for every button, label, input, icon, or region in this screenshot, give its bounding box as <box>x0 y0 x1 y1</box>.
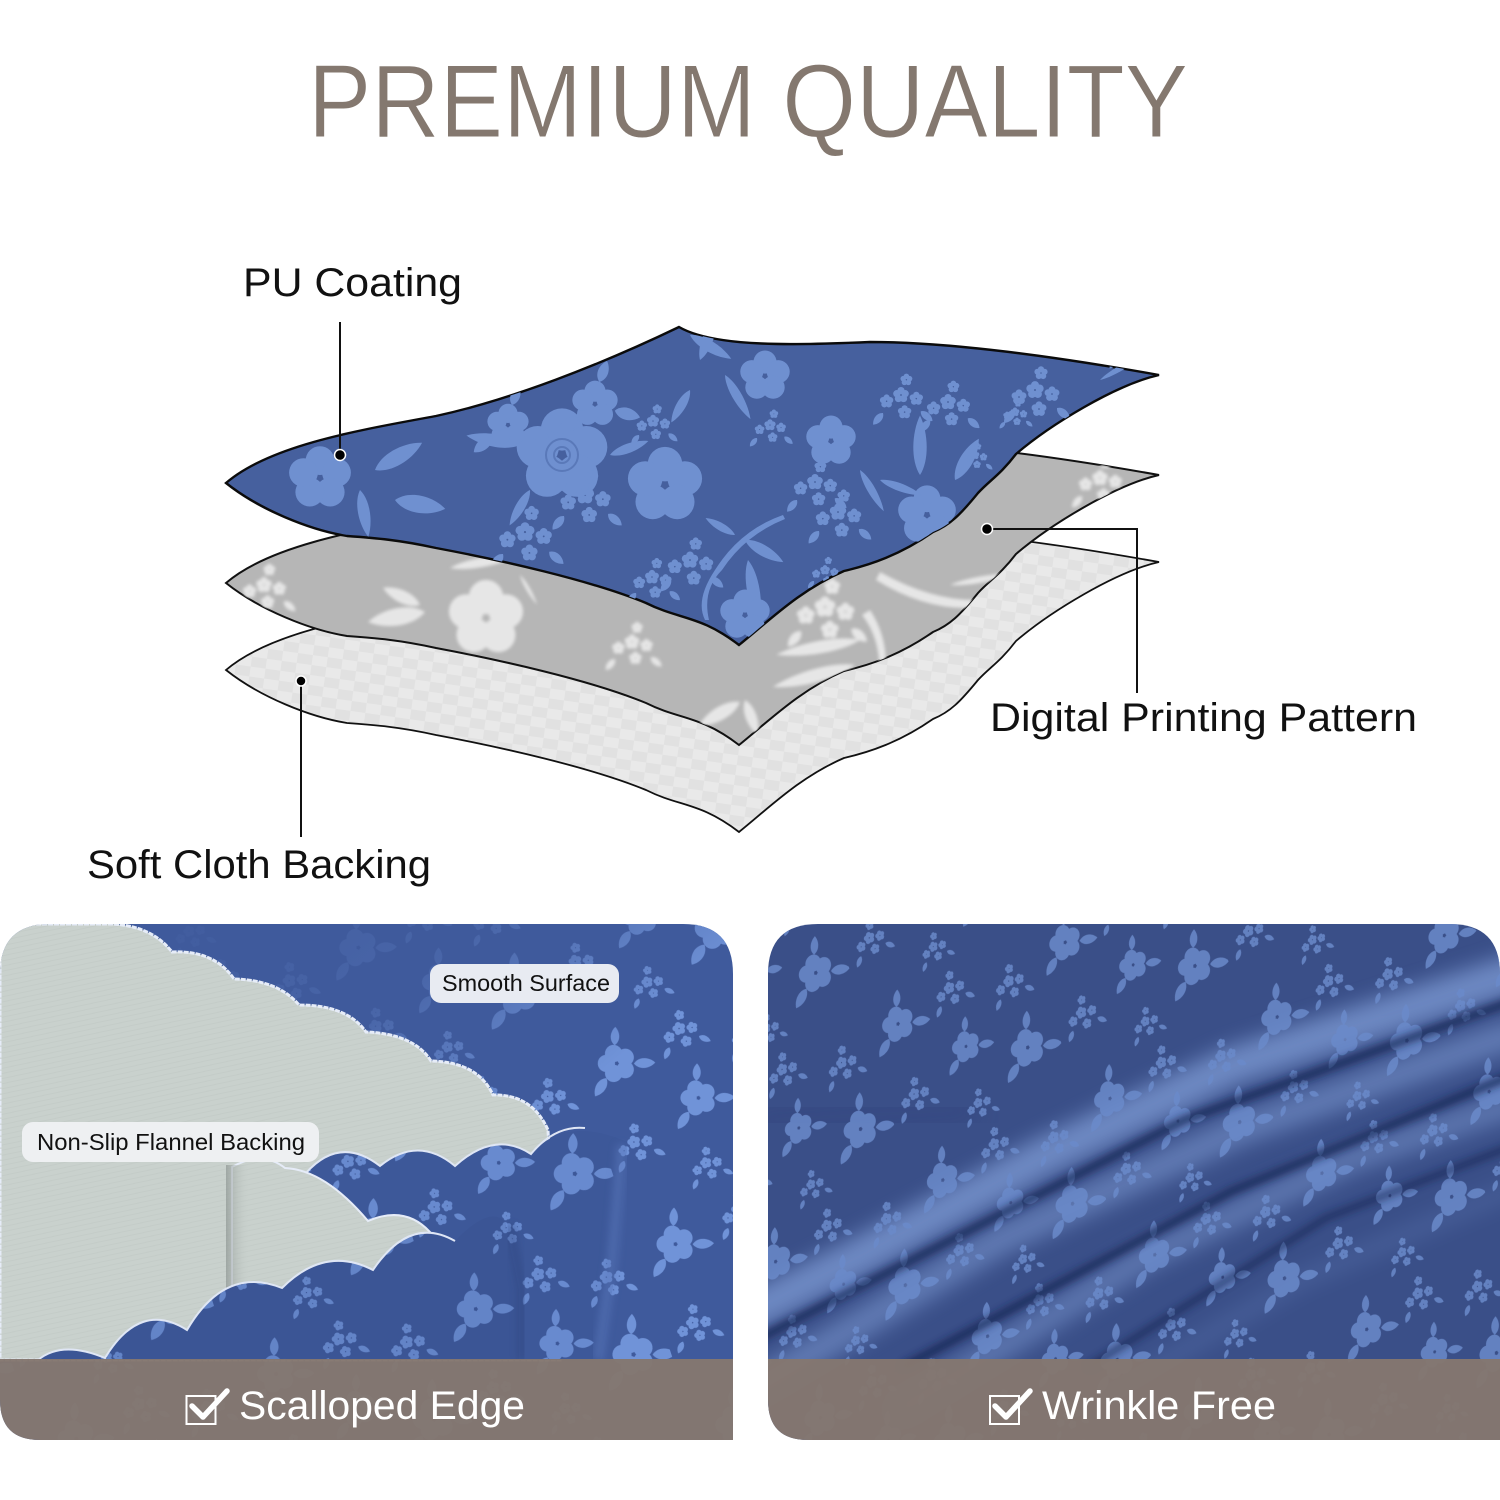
label: PU Coating: PU Coating <box>243 261 462 305</box>
panel: scalloped edge photo <box>0 924 733 1440</box>
label: Soft Cloth Backing: Soft Cloth Backing <box>87 843 431 887</box>
inner cream roll <box>226 1162 431 1288</box>
label: Soft Cloth Backing <box>87 676 431 887</box>
caption band <box>768 1359 1500 1440</box>
caption: Wrinkle Free: Wrinkle Free <box>1042 1384 1276 1428</box>
fold creases <box>762 1002 1500 1366</box>
caption band <box>0 1359 733 1440</box>
layer: soft cloth backing <box>226 514 1159 832</box>
label: PU Coating <box>243 261 462 460</box>
pill: Non-Slip Flannel Backing: Non-Slip Flannel Backing <box>37 1129 305 1155</box>
pill: Smooth Surface <box>430 964 619 1003</box>
layer: digital printing pattern <box>226 427 1159 745</box>
caption: Scalloped Edge: Scalloped Edge <box>239 1384 525 1428</box>
lower scalloped fold <box>38 1217 522 1360</box>
pill: Non-Slip Flannel Backing <box>22 1122 319 1162</box>
fold highlights <box>750 975 1500 1410</box>
pill: Smooth Surface: Smooth Surface <box>442 970 610 996</box>
title: PREMIUM QUALITY <box>308 44 1188 160</box>
layer: PU coating <box>226 313 1159 645</box>
cream backing with scalloped edge <box>0 924 560 1360</box>
layer diagram <box>226 313 1159 832</box>
icon: checkbox <box>186 1391 227 1424</box>
panel: wrinkle free photo <box>750 924 1500 1440</box>
upper folded scallop <box>300 1128 627 1360</box>
floral jacquard <box>768 924 1500 1359</box>
label: Digital Printing Pattern: Digital Printing Pattern <box>990 696 1417 740</box>
icon: checkbox <box>990 1391 1030 1424</box>
label: Digital Printing Pattern <box>982 524 1417 740</box>
